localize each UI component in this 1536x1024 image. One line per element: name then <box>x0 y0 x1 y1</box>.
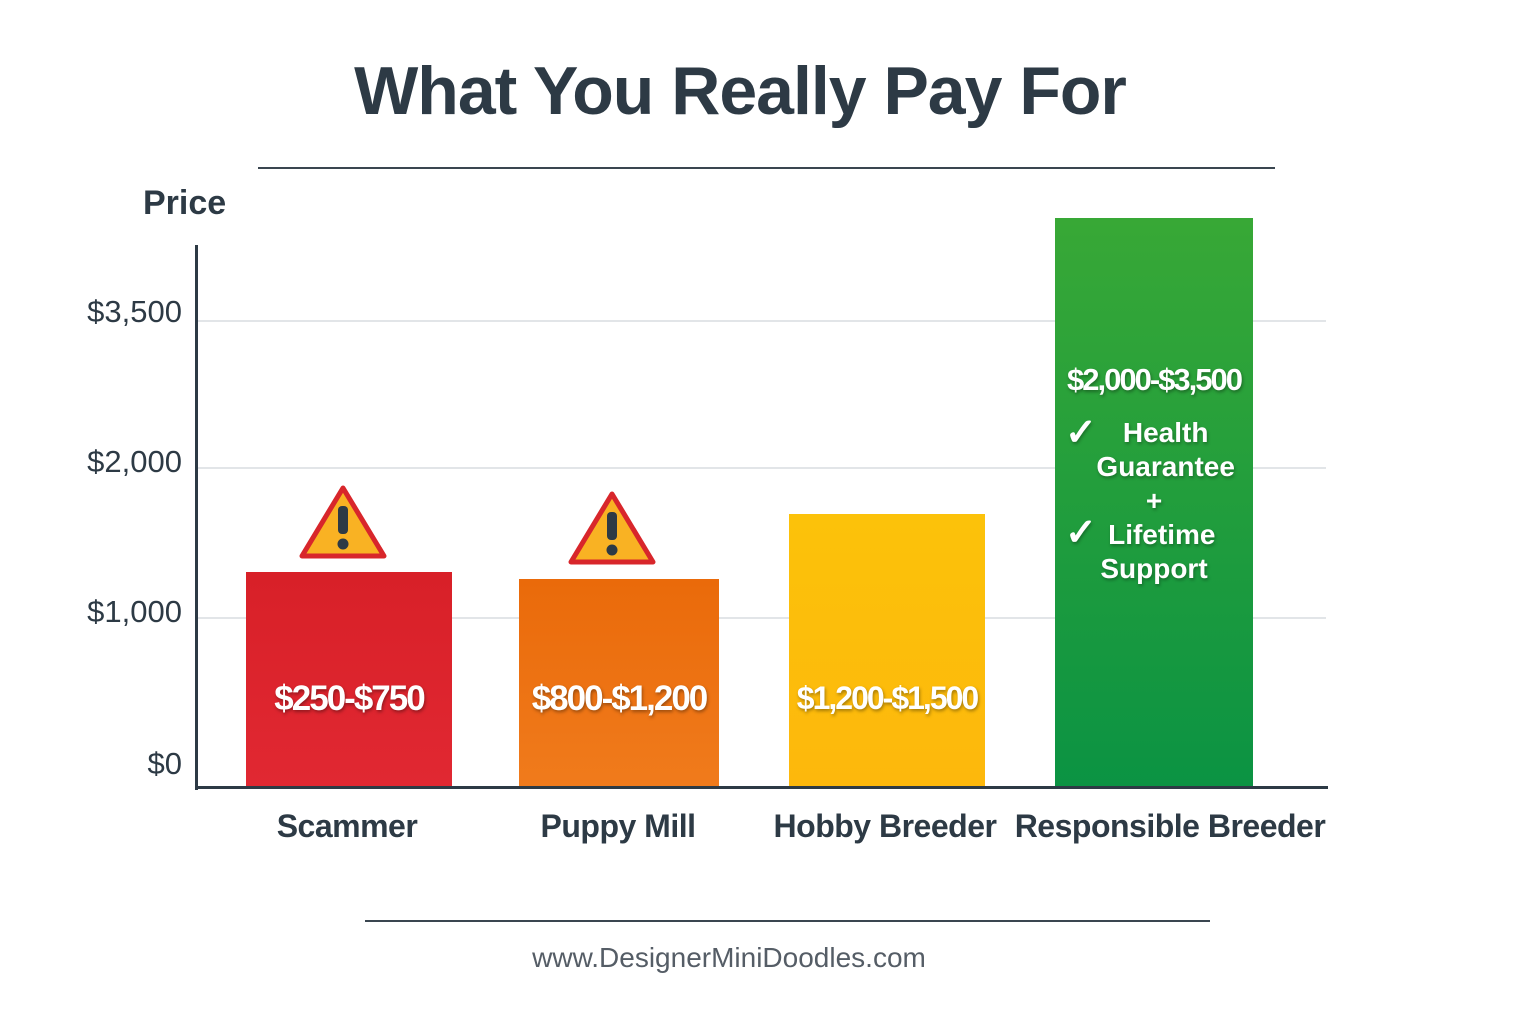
bar: hobby breeder <box>789 514 985 788</box>
bar: responsible breeder: Lifetime <box>1108 519 1215 550</box>
y axis labels: $1,000 <box>87 594 182 629</box>
category labels: Hobby Breeder <box>774 808 996 844</box>
y axis labels <box>87 294 182 781</box>
bar: responsible breeder <box>1055 218 1253 788</box>
bar: scammer <box>246 572 452 788</box>
y axis labels: $3,500 <box>87 294 182 329</box>
icon: warning 2 <box>568 492 656 564</box>
y axis labels: $0 <box>148 746 182 781</box>
bar: scammer: $250-$750 <box>274 679 424 718</box>
bar: puppy mill <box>519 579 719 788</box>
bar: puppy mill: $800-$1,200 <box>532 679 706 718</box>
category labels: Puppy Mill <box>540 808 696 844</box>
title: What You Really Pay For <box>354 53 1126 129</box>
bar: responsible breeder: Guarantee <box>1096 451 1235 482</box>
axis title: Price: Price <box>143 184 226 222</box>
category labels: Responsible Breeder <box>1015 808 1325 844</box>
bar: responsible breeder: $2,000-$3,500 <box>1067 362 1241 397</box>
bar: responsible breeder: ✓ <box>1065 512 1097 554</box>
y axis labels: $2,000 <box>87 444 182 479</box>
icon: warning 1 <box>300 486 386 558</box>
category labels: Scammer <box>277 808 417 844</box>
bar: responsible breeder: + <box>1146 485 1162 516</box>
footer url: www.DesignerMiniDoodles.com <box>532 942 926 973</box>
bar: hobby breeder: $1,200-$1,500 <box>797 680 977 716</box>
bar: responsible breeder: Health <box>1123 417 1208 448</box>
bar: responsible breeder: ✓ <box>1065 412 1097 454</box>
bar: responsible breeder: Support <box>1100 553 1208 584</box>
category labels <box>277 808 1326 844</box>
